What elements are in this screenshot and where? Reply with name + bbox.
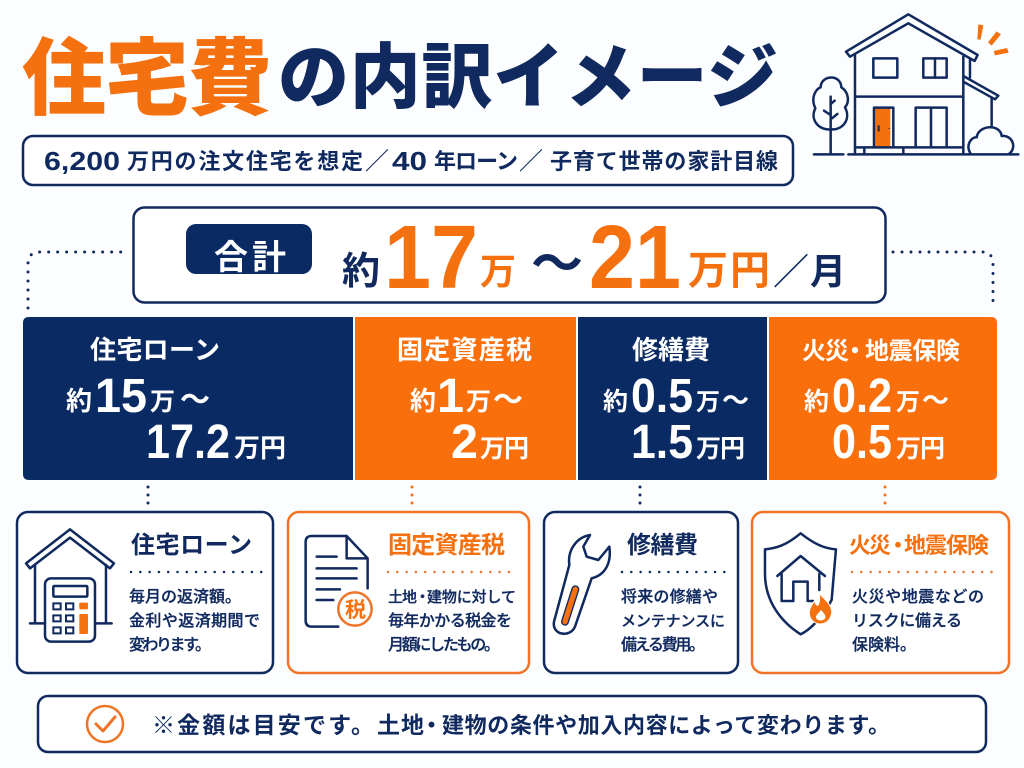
total amount: 17 [384,208,478,308]
total label pill [186,224,312,279]
bar segment: insurance: 約 [804,382,829,418]
card heading: 固定資産税 [388,525,505,560]
subtitle box: 年ローン [434,144,518,176]
bar segment: insurance: 0.5 [832,416,892,469]
note text: 土地 [377,706,424,740]
bar segment: housing loan: 15 [95,370,147,423]
bar segment: property tax: 固定資産税 [397,330,532,367]
card heading: 火災 [849,528,891,560]
card body text: 毎月の返済額。 [129,583,241,607]
connector dots: property tax [410,487,414,505]
bar segment: repairs: 〜 [722,379,749,418]
card body text: メンテナンスに [621,610,725,631]
icon: wrench [554,535,610,634]
title: 住宅費 [22,12,272,133]
bar segment: property tax: 〜 [493,375,523,419]
total panel [134,208,886,308]
total amount [342,208,846,308]
bar segment: housing loan: 17.2 [146,416,230,469]
note text [152,706,890,740]
subtitle box: 40 [392,146,427,176]
panel: repairs detail [544,512,738,673]
bar segment: repairs: 1.5 [631,416,693,469]
card body text: 毎年かかる税金を [388,607,512,631]
subtitle box [23,136,793,185]
card body text: 火災や地震などの [852,583,984,607]
icon: check mark [87,706,123,742]
bar segment: insurance: 地震保険 [865,331,960,366]
card body text [388,586,516,655]
title [22,12,778,133]
bar segment: housing loan: 〜 [180,375,210,419]
connector dots: housing loan [146,487,150,505]
card heading: 修繕費 [627,525,698,560]
connector dots: insurance [884,487,886,505]
bar segment: property tax: 万 [466,382,491,418]
card heading: ・ [887,528,909,560]
panel: insurance detail [752,512,1009,673]
total label pill: 合計 [214,230,286,279]
bar segment: insurance: 火災 [802,331,849,366]
connector: right dotted line [893,252,993,308]
bar segment: repairs: 約 [603,382,628,418]
note text: 建物の条件や加入内容によって変わります。 [442,708,890,740]
bar segment: repairs: 0.5 [631,370,693,423]
icon: house with calculator [26,529,114,642]
card body text: 備える費用。 [621,631,705,655]
bar segment: property tax: 約 [410,381,436,418]
bar segment: repairs: 万 [696,382,720,417]
bar segment: repairs: 修繕費 [632,330,710,367]
card body text: 月額にしたもの。 [388,631,500,655]
footer note [38,696,986,752]
bar segment: housing loan: 万 [150,382,175,418]
connector: left dotted line [28,252,122,308]
bar segment: repairs [578,317,767,480]
icon: tax document [306,536,372,627]
bar segment: housing loan: 万円 [234,428,286,465]
total amount: 21 [589,208,681,308]
card heading: 地震保険 [904,528,989,560]
total amount: 約 [342,240,380,295]
card body text [129,583,260,655]
card heading [849,528,989,560]
card body text [621,583,725,655]
subtitle box: ／ [365,141,389,176]
card body text: 建物に対して [427,586,516,607]
bar segment: property tax: 1 [437,370,464,423]
bar segment: insurance [769,317,997,480]
icon: house illustration [813,14,1018,154]
card body text: 保険料。 [852,631,916,655]
bar segment: property tax [355,317,576,480]
title: の内訳イメージ [278,21,778,123]
bar segment: housing loan [23,317,353,480]
subtitle box: ／ [519,141,543,176]
connector dots: repairs [638,487,642,505]
card body text: ・ [415,586,430,607]
bar segment: housing loan: 住宅ローン [90,330,220,367]
bar segment: insurance: ・ [843,331,867,366]
card body text: 土地 [388,586,417,607]
total amount: 〜 [531,222,583,297]
bar segment: insurance: 0.2 [832,370,892,423]
note text: ・ [420,706,443,740]
total amount: 月 [810,243,846,295]
total amount: 万 [480,243,516,295]
bar segment: property tax: 万円 [480,429,529,465]
panel: property tax detail [288,512,529,673]
card body text [852,583,984,655]
card body text: 金利や返済期間で [129,607,260,631]
bar segment: insurance: 〜 [922,379,949,418]
icon: shield with house and flame [765,533,836,634]
card heading: 住宅ローン [131,525,252,560]
subtitle box: 6,200 [44,146,120,176]
subtitle box: 子育て世帯の家計目線 [550,144,778,176]
bar segment: repairs: 万円 [696,429,745,465]
bar segment: housing loan: 約 [66,381,92,418]
note text: ※金額は目安です。 [152,706,374,740]
subtitle box: 万円の注文住宅を想定 [127,144,363,176]
icon label: tax: 税 [345,594,366,624]
total amount: ／ [773,243,809,295]
card body text: 変わります。 [129,631,211,655]
bar segment: insurance: 万 [896,382,920,417]
bar segment: insurance: 万円 [896,429,945,465]
bar segment: property tax: 2 [451,416,478,469]
card body text: 将来の修繕や [621,583,718,607]
total amount: 万円 [688,238,770,296]
card body text: リスクに備える [852,607,962,631]
panel: housing loan detail [17,512,273,673]
